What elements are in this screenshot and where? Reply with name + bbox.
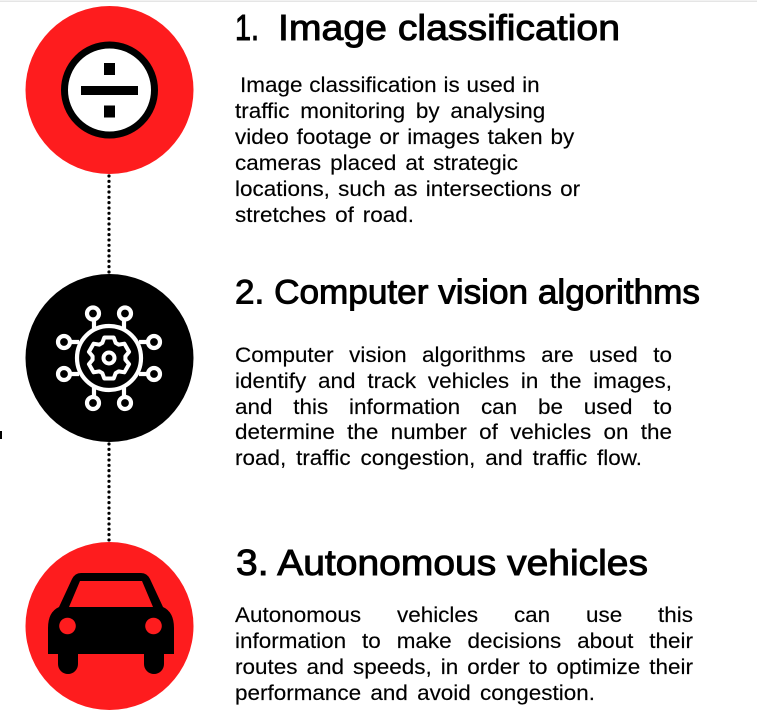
text block: computer vision algorithms: identify and track vehicles in the images, — [235, 370, 672, 392]
text block: computer vision algorithms: road, traffic congestion, and traffic flow. — [235, 446, 642, 470]
text block: autonomous vehicles: information to make decisions about their — [235, 630, 693, 652]
text block: image classification — [235, 74, 580, 226]
small edge mark — [0, 431, 2, 439]
text block: autonomous vehicles: Autonomous vehicles can use this — [235, 604, 693, 626]
text block: computer vision algorithms — [235, 344, 672, 470]
text block: image classification: stretches of road. — [235, 204, 414, 226]
text block: image classification: video footage or images taken by — [235, 126, 574, 148]
icon: gear network in black circle — [26, 274, 194, 442]
text block: autonomous vehicles: performance and avoid congestion. — [235, 682, 595, 704]
icon: division sign in red circle — [26, 6, 194, 174]
dotted connector 1 to 2 — [107, 176, 111, 274]
text block: computer vision algorithms: Computer vision algorithms are used to — [235, 344, 672, 366]
text block: image classification: Image classification is used in — [240, 74, 540, 96]
text block: computer vision algorithms: determine the number of vehicles on the — [235, 420, 672, 444]
icon: car in red circle — [26, 542, 194, 710]
text block: autonomous vehicles — [235, 604, 693, 705]
heading: 3. Autonomous vehicles: 3. Autonomous vehicles — [236, 542, 648, 583]
heading: 2. Computer vision algorithms: 2. Computer vision algorithms — [235, 274, 700, 312]
text block: computer vision algorithms: and this information can be used to — [235, 396, 672, 418]
heading: 1. Image classification: Image classification — [278, 7, 620, 48]
text block: autonomous vehicles: routes and speeds, in order to optimize their — [235, 656, 693, 678]
text block: image classification: traffic monitoring by analysing — [235, 100, 545, 122]
text block: image classification: cameras placed at strategic — [235, 152, 518, 174]
text block: image classification: locations, such as intersections or — [235, 178, 580, 200]
dotted connector 2 to 3 — [107, 444, 111, 542]
heading: 1. Image classification: 1. — [235, 7, 259, 48]
